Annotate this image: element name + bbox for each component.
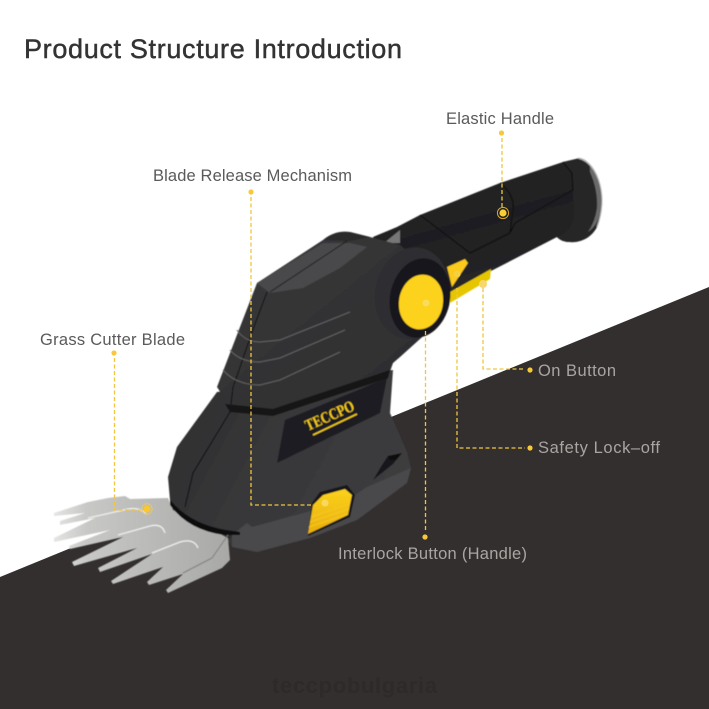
- watermark: teccpobulgaria: [272, 673, 438, 698]
- dark diagonal background: [0, 287, 709, 709]
- head housing: [185, 232, 440, 507]
- callout: Interlock Button (Handle): Interlock Button (Handle): [338, 545, 527, 563]
- callout: On Button: On Button: [538, 362, 616, 380]
- interlock release button: [308, 485, 355, 536]
- title: Product Structure Introduction: [24, 34, 402, 64]
- callout: Safety Lock-off: Safety Lock–off: [538, 439, 660, 457]
- callout: Interlock Button (Handle): [338, 300, 527, 563]
- callout: Blade Release Mechanism: Blade Release Mechanism: [153, 167, 352, 185]
- callout: Grass Cutter Blade: [40, 331, 185, 514]
- logo panel with TECCPO logo: [277, 378, 387, 463]
- base: [168, 370, 411, 552]
- callout: On Button: [479, 280, 616, 380]
- callout: Elastic Handle: Elastic Handle: [446, 110, 554, 128]
- trigger and safety lock: [447, 259, 491, 303]
- handle: [373, 158, 602, 320]
- callout: Elastic Handle: [446, 110, 554, 219]
- hedge trimmer product illustration: [54, 158, 602, 593]
- logo panel with TECCPO logo: TECCPO: [303, 398, 357, 435]
- callout: Blade Release Mechanism: [153, 167, 352, 506]
- blade: [54, 496, 230, 593]
- callout: Grass Cutter Blade: Grass Cutter Blade: [40, 331, 185, 349]
- adjustment wheel: [366, 240, 458, 346]
- callout: Safety Lock-off: [454, 270, 660, 457]
